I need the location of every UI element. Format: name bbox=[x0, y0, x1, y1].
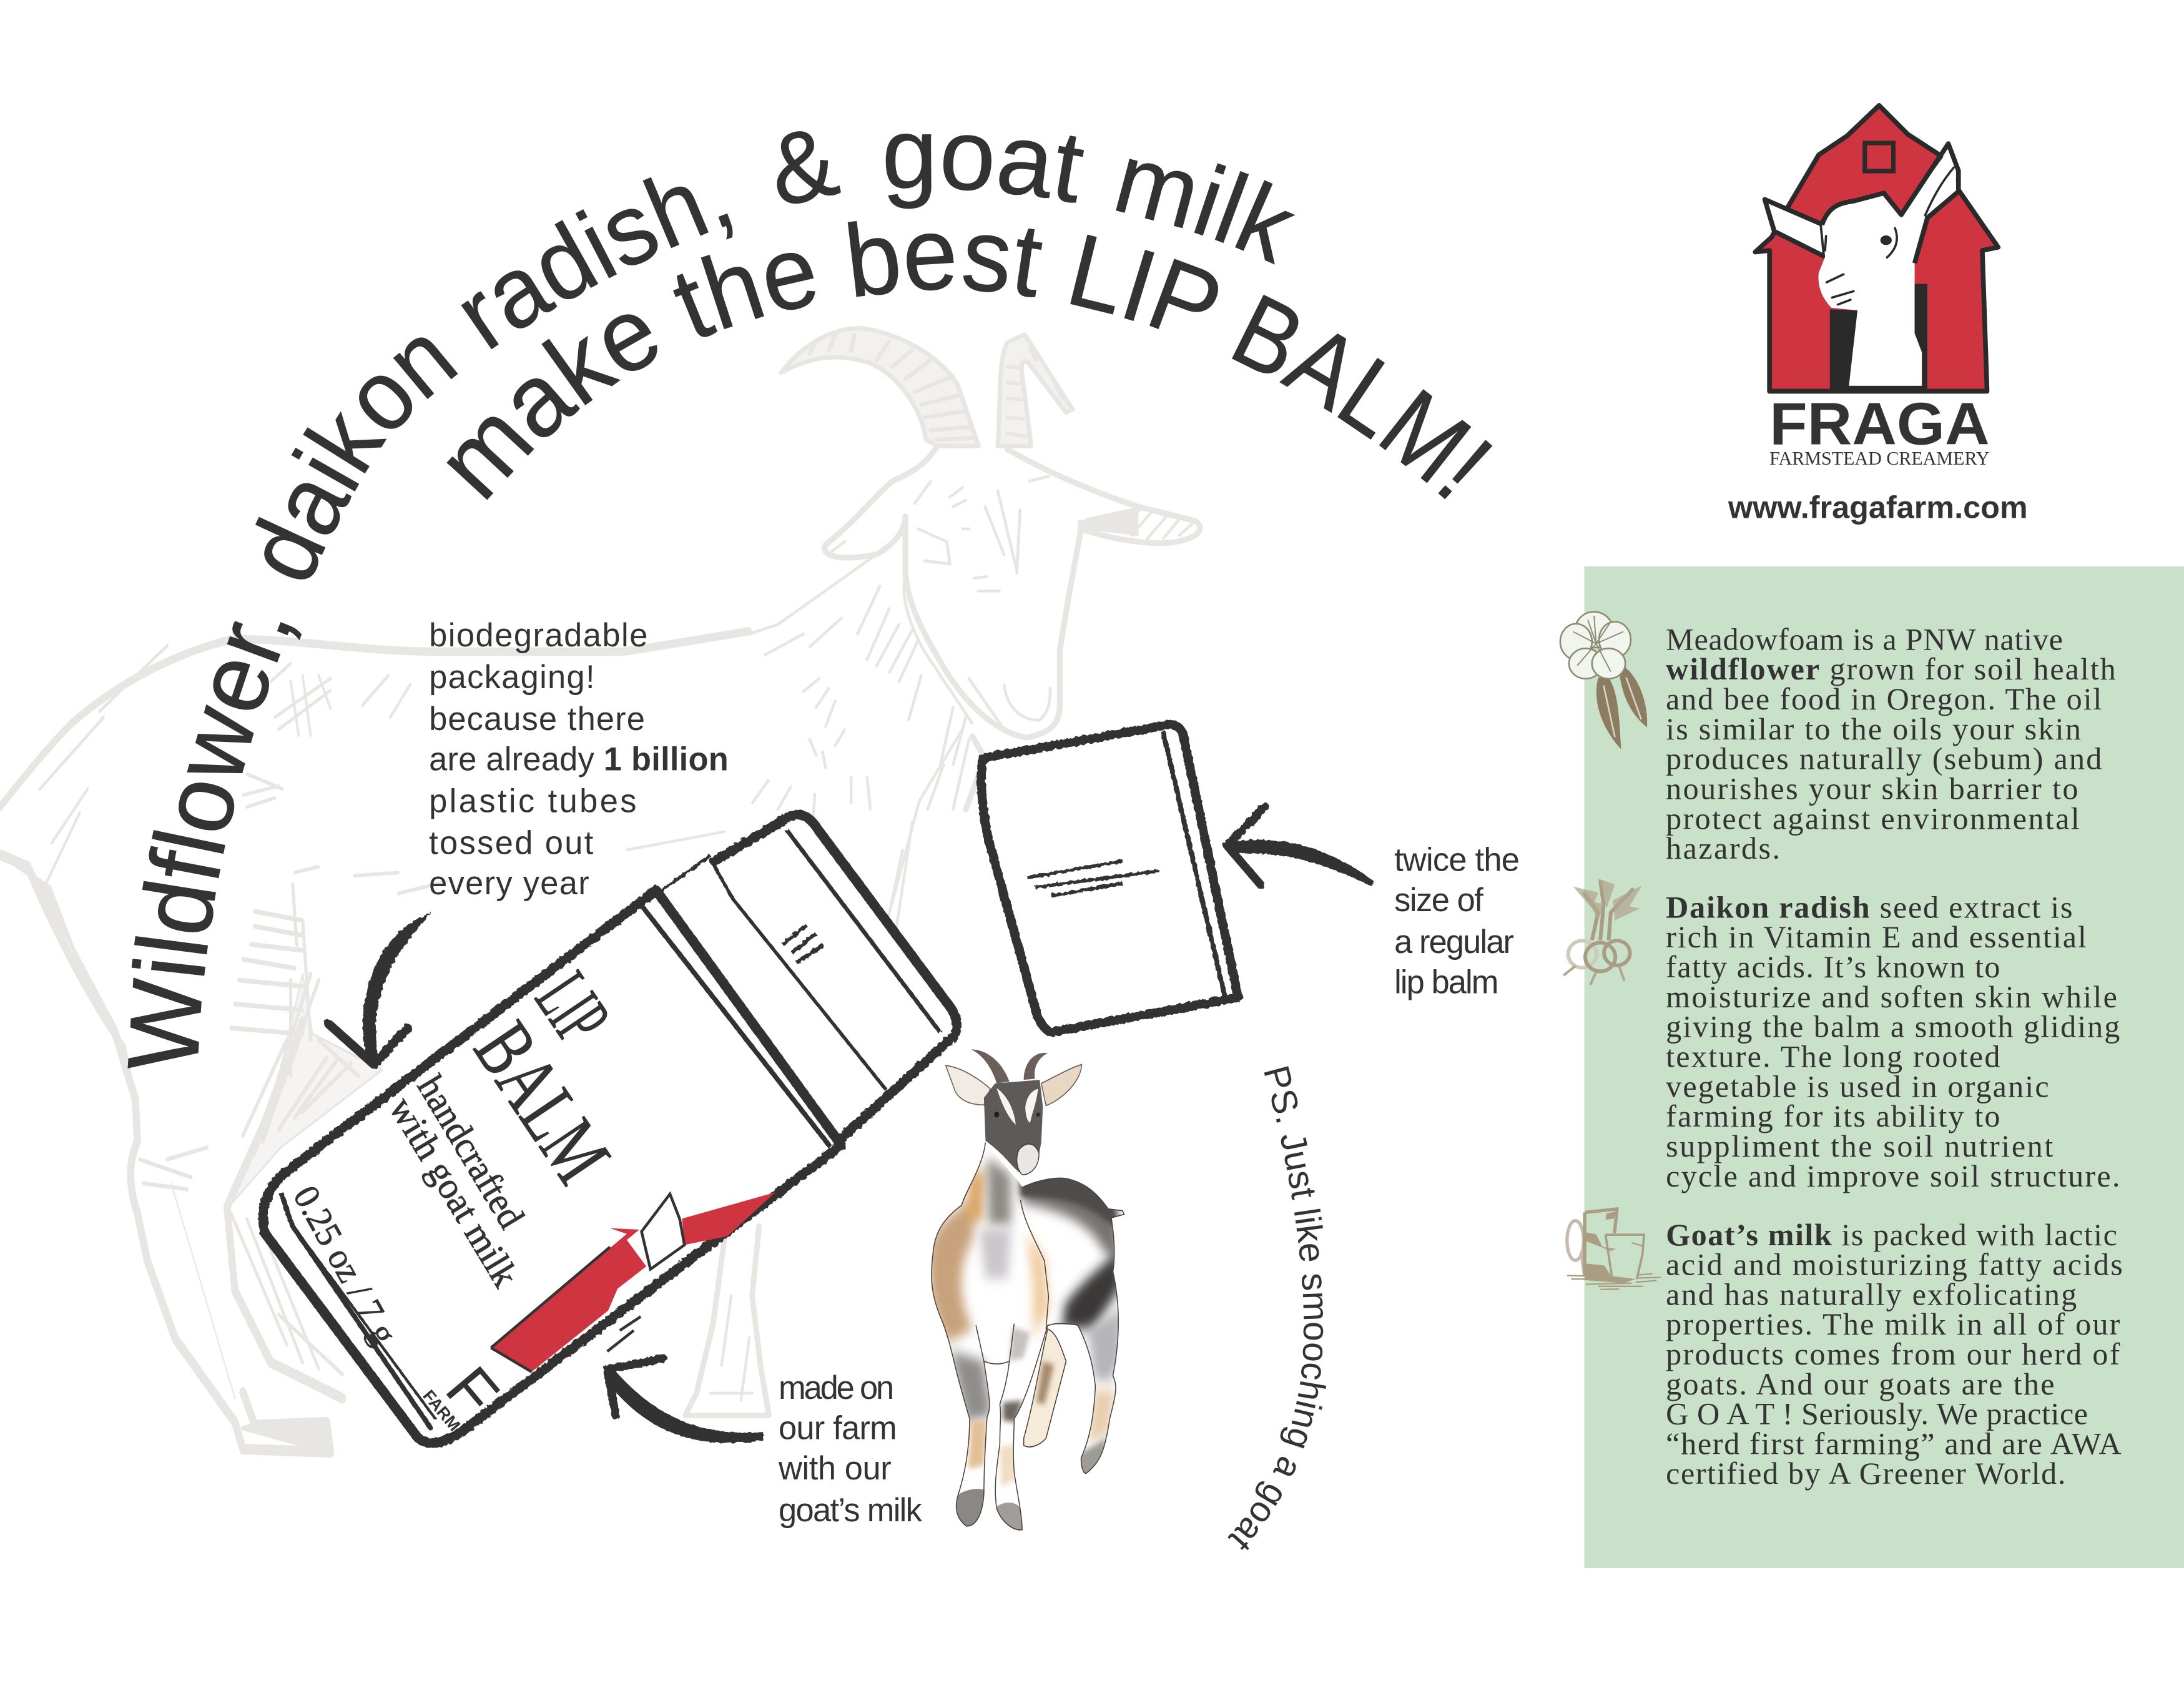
panel text: wildflower paragraph: nourishes your skin barrier to bbox=[1666, 771, 2078, 806]
panel text: wildflower paragraph bbox=[1666, 622, 2116, 866]
tube body bbox=[263, 891, 841, 1443]
arrow: toward cap bbox=[1227, 807, 1372, 885]
panel text: daikon paragraph: rich in Vitamin E and essential bbox=[1666, 919, 2087, 954]
panel text: daikon paragraph: texture. The long rooted bbox=[1666, 1039, 2000, 1074]
panel text: wildflower paragraph: Meadowfoam is a PNW native bbox=[1666, 622, 2063, 657]
panel text: daikon paragraph: farming for its ability to bbox=[1666, 1098, 2000, 1133]
goat head and neck bbox=[1818, 150, 1959, 386]
logo: Fraga barn and goat bbox=[1755, 106, 1998, 392]
barn door shadows bbox=[1830, 284, 1927, 390]
tube label text: handcrafted bbox=[409, 1069, 533, 1235]
panel text: goat milk paragraph: properties. The milk in all of our bbox=[1666, 1306, 2120, 1341]
title: first curved line: goat bbox=[885, 134, 1084, 209]
title: second curved line: BALM! bbox=[1232, 295, 1492, 500]
title: first curved line: & bbox=[777, 131, 841, 204]
logo wordmark: FARMSTEAD CREAMERY bbox=[1769, 448, 1990, 469]
callout: biodegradable packaging: packaging! bbox=[429, 659, 595, 696]
callout: twice the size: twice the bbox=[1394, 842, 1520, 878]
panel text: goat milk paragraph: products comes from our herd of bbox=[1666, 1336, 2120, 1371]
title: first curved line: radish, bbox=[461, 177, 733, 350]
goat left ear bbox=[1765, 199, 1825, 257]
barn window bbox=[1865, 143, 1894, 171]
tube label text: FARMSTEAD bbox=[419, 1386, 500, 1478]
callout: biodegradable packaging: tossed out bbox=[429, 826, 594, 862]
callout: made on our farm: made on bbox=[779, 1370, 894, 1406]
panel: ingredients background bbox=[1585, 566, 2184, 1568]
panel text: goat milk paragraph: G O A T ! Seriously. We practice bbox=[1666, 1396, 2088, 1431]
barn bbox=[1755, 106, 1998, 392]
icon: meadowfoam flower bbox=[1560, 612, 1647, 749]
red barn label bbox=[491, 1192, 775, 1372]
panel text: daikon paragraph bbox=[1666, 890, 2120, 1193]
tube label text bbox=[295, 969, 612, 1431]
background goat illustration bbox=[0, 328, 1200, 1452]
callout: twice the size: lip balm bbox=[1394, 965, 1498, 1001]
panel text: wildflower paragraph: is similar to the oils your skin bbox=[1666, 711, 2081, 746]
panel text: goat milk paragraph: Goat’s milk is packed with lactic bbox=[1666, 1217, 2117, 1252]
watercolor washes bbox=[928, 1157, 1123, 1533]
icon: goat milk jugs bbox=[1567, 1209, 1661, 1290]
callout: twice the size bbox=[1394, 842, 1520, 1001]
panel text: daikon paragraph: vegetable is used in organic bbox=[1666, 1069, 2049, 1103]
panel text: daikon paragraph: moisturize and soften skin while bbox=[1666, 979, 2117, 1014]
website url: www.fragafarm.com bbox=[1728, 490, 2028, 525]
panel text: wildflower paragraph: and bee food in Oregon. The oil bbox=[1666, 681, 2102, 716]
lip balm tube bbox=[257, 809, 962, 1448]
arrow: packaging callout to bottle bbox=[328, 912, 432, 1064]
tube label text: with goat milk bbox=[381, 1090, 527, 1295]
background goat front legs bbox=[627, 731, 961, 1416]
panel text: goat milk paragraph: goats. And our goats are the bbox=[1666, 1366, 2055, 1401]
tube label text: BALM bbox=[457, 1006, 629, 1199]
callout: made on our farm: our farm bbox=[779, 1411, 897, 1447]
tube label text: LIP bbox=[519, 957, 627, 1058]
panel text: wildflower paragraph: wildflower grown for soil health bbox=[1666, 651, 2116, 686]
panel text: wildflower paragraph: produces naturally (sebum) and bbox=[1666, 741, 2102, 776]
panel text: daikon paragraph: fatty acids. It’s known to bbox=[1666, 949, 2000, 984]
background goat head bbox=[749, 328, 1200, 809]
goat face marks bbox=[1825, 167, 1954, 305]
tube cap bbox=[656, 813, 957, 1138]
panel text: wildflower paragraph: hazards. bbox=[1666, 831, 1780, 866]
callout: biodegradable packaging bbox=[429, 618, 729, 902]
callout: made on our farm: with our bbox=[778, 1451, 892, 1487]
panel text: daikon paragraph: giving the balm a smooth gliding bbox=[1666, 1009, 2120, 1044]
tube label text: FRAGA bbox=[433, 1353, 629, 1569]
panel text: wildflower paragraph: protect against environmental bbox=[1666, 801, 2080, 836]
callout: biodegradable packaging: because there bbox=[429, 701, 645, 738]
goat outline and chest lines bbox=[932, 1143, 1124, 1530]
panel text: goat milk paragraph bbox=[1666, 1217, 2123, 1491]
panel text: daikon paragraph: suppliment the soil nutrient bbox=[1666, 1128, 2053, 1163]
callout: biodegradable packaging: are already 1 billion bbox=[429, 742, 729, 778]
callout: made on our farm: goat’s milk bbox=[779, 1493, 923, 1529]
callout: biodegradable packaging: every year bbox=[429, 866, 589, 902]
title: second curved line: make the best LIP bbox=[446, 221, 1218, 500]
watercolor goat body silhouette bbox=[932, 1143, 1124, 1530]
logo wordmark: FRAGA bbox=[1769, 391, 1990, 458]
title: second curved line bbox=[446, 221, 1492, 500]
title: first curved line bbox=[127, 131, 1295, 1069]
callout: made on our farm bbox=[778, 1370, 923, 1529]
title: first curved line: milk bbox=[1116, 159, 1295, 265]
panel text: goat milk paragraph: “herd first farming” and are AWA bbox=[1666, 1426, 2122, 1461]
panel text: goat milk paragraph: and has naturally exfolicating bbox=[1666, 1276, 2077, 1311]
tube label text: 0.25 oz / 7 g bbox=[285, 1179, 405, 1351]
background goat body bbox=[0, 631, 749, 1452]
title: first curved line: daikon bbox=[255, 337, 458, 580]
panel text: goat milk paragraph: acid and moisturizing fatty acids bbox=[1666, 1247, 2123, 1282]
callout: biodegradable packaging: plastic tubes bbox=[429, 784, 637, 820]
panel text: goat milk paragraph: certified by A Greener World. bbox=[1666, 1456, 2065, 1491]
title: first curved line: Wildflower, bbox=[127, 621, 302, 1069]
icon: daikon radish bbox=[1563, 879, 1642, 985]
watercolor goat bbox=[928, 1049, 1124, 1533]
separate lip balm cap bbox=[981, 724, 1238, 1032]
callout: biodegradable packaging: biodegradable bbox=[429, 618, 647, 654]
callout: twice the size: size of bbox=[1394, 882, 1483, 919]
goat horns bbox=[971, 1049, 1010, 1083]
panel text: daikon paragraph: Daikon radish seed extract is bbox=[1666, 890, 2073, 925]
PS curved caption: PS. Just like smooching a goat bbox=[1227, 1066, 1326, 1550]
goat head bbox=[984, 1080, 1043, 1175]
rear leg bbox=[1024, 1329, 1066, 1447]
panel text: daikon paragraph: cycle and improve soil structure. bbox=[1666, 1158, 2120, 1193]
callout: twice the size: a regular bbox=[1394, 924, 1514, 960]
goat ears bbox=[946, 1065, 990, 1105]
arrow: toward red label bbox=[607, 1358, 760, 1440]
